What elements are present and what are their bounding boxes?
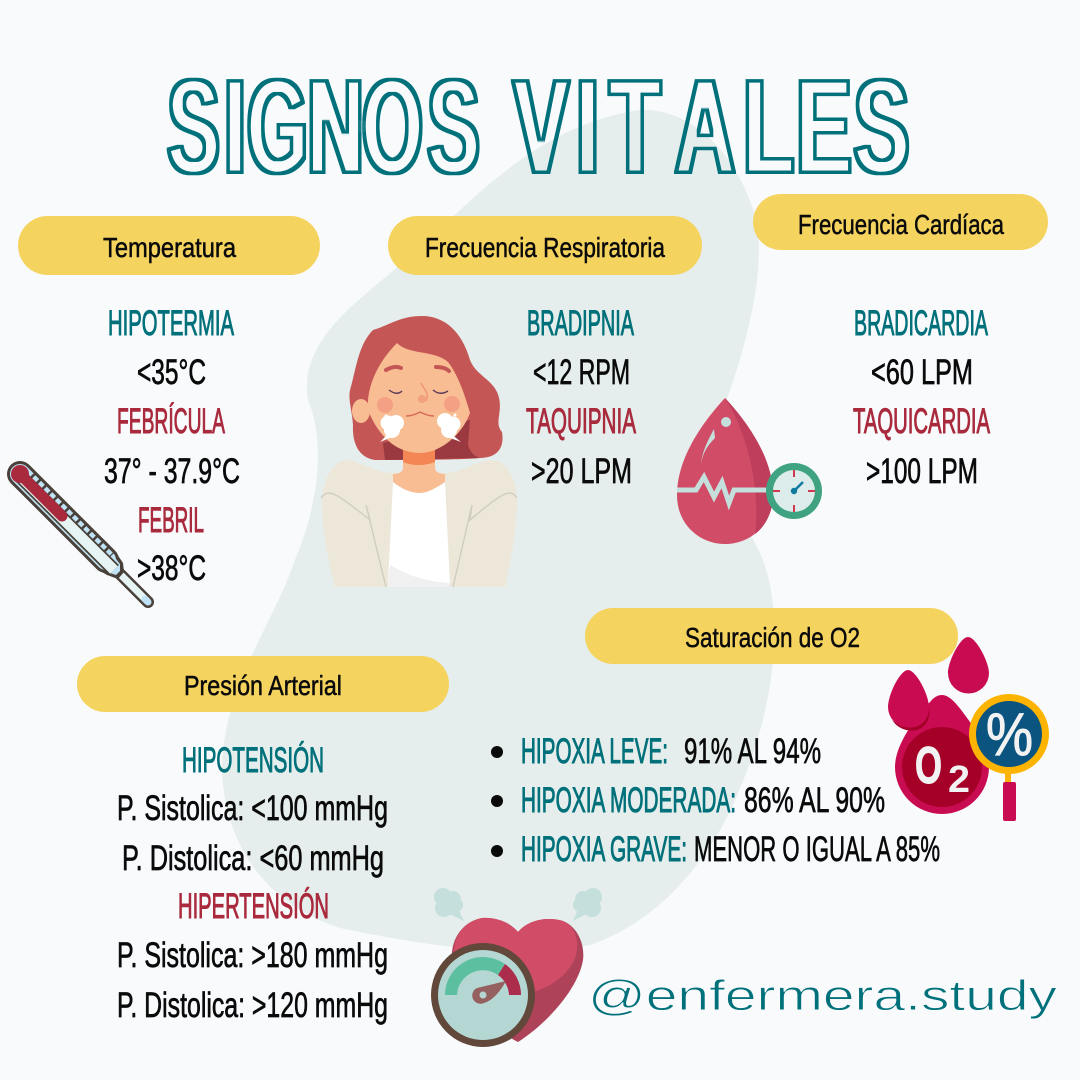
- handle: @enfermera.study: [588, 972, 1058, 1020]
- pill heading: frecuencia respiratoria: [388, 216, 702, 275]
- panel: temperatura: [18, 216, 320, 588]
- bullet: hipoxia leve: 91% AL 94%: [684, 732, 821, 771]
- label: hipotermia: HIPOTERMIA: [108, 304, 234, 343]
- cheeks: [377, 397, 393, 413]
- panel: frecuencia respiratoria: [388, 216, 702, 491]
- pill heading: saturacion: Saturación de O2: [685, 622, 860, 653]
- mouth: [406, 412, 434, 416]
- smoke puffs: [434, 888, 602, 921]
- background blob: [222, 110, 774, 951]
- bullet: hipoxia moderada: 86% AL 90%: [744, 781, 885, 820]
- pill heading: frecuencia cardiaca: Frecuencia Cardíaca: [798, 209, 1004, 240]
- bullet: hipoxia grave: HIPOXIA GRAVE:: [521, 830, 687, 869]
- icon: O2 drops with magnifier: 2: [948, 759, 970, 801]
- eyebrows: [386, 367, 449, 371]
- panel: presion arterial: [77, 656, 449, 1025]
- pill heading: temperatura: [18, 216, 320, 275]
- hair: [349, 316, 503, 460]
- title: [167, 50, 909, 202]
- label: taquipnia: TAQUIPNIA: [526, 402, 636, 441]
- bullet: hipoxia grave: [491, 830, 940, 869]
- title: VITALES: [513, 50, 909, 202]
- value: bradipnia: <12 RPM: [533, 353, 630, 392]
- label: hipertension: HIPERTENSIÓN: [178, 887, 329, 926]
- value: febril: >38°C: [137, 549, 206, 588]
- title: SIGNOS: [167, 52, 480, 202]
- jacket folds: [321, 493, 517, 587]
- panel: saturacion de O2: [491, 608, 958, 869]
- face: [368, 343, 470, 453]
- value: hipotermia: <35°C: [137, 353, 206, 392]
- hair shadow: [383, 420, 480, 460]
- pill heading: frecuencia cardiaca: [753, 194, 1048, 250]
- pill heading: temperatura: Temperatura: [103, 232, 236, 263]
- icon: heart with pressure gauge: [431, 888, 602, 1047]
- value: taquipnia: >20 LPM: [531, 452, 632, 491]
- value: taquicardia: >100 LPM: [866, 452, 978, 491]
- value: distolica baja: P. Distolica: <60 mmHg: [122, 839, 384, 878]
- bullet: hipoxia leve: HIPOXIA LEVE:: [521, 732, 668, 771]
- icon: thermometer: [11, 465, 148, 602]
- nose: [421, 383, 427, 401]
- value: bradicardia: <60 LPM: [871, 353, 973, 392]
- bullet: hipoxia moderada: HIPOXIA MODERADA:: [521, 781, 736, 820]
- icon: blood drop with gauge: [677, 398, 822, 544]
- shirt: [388, 482, 450, 584]
- steam puffs: [380, 413, 461, 442]
- pill heading: frecuencia respiratoria: Frecuencia Respiratoria: [425, 232, 665, 263]
- neck: [393, 448, 445, 493]
- icon: O2 drops with magnifier: [888, 637, 1049, 821]
- label: hipotension: HIPOTENSIÓN: [182, 741, 324, 780]
- panel: frecuencia cardiaca: [753, 194, 1048, 491]
- eyes: [389, 390, 448, 393]
- pill heading: presion arterial: [77, 656, 449, 712]
- label: febricula: FEBRÍCULA: [117, 402, 225, 441]
- bullet: hipoxia grave: MENOR O IGUAL A 85%: [694, 830, 940, 869]
- label: bradipnia: BRADIPNIA: [527, 304, 634, 343]
- value: sistolica alta: P. Sistolica: >180 mmHg: [117, 936, 388, 975]
- illustration: woman with fever: [321, 316, 517, 587]
- collar shadow: [403, 450, 435, 465]
- jacket: [322, 460, 517, 587]
- pill heading: saturacion: [585, 608, 958, 664]
- icon: O2 drops with magnifier: %: [986, 701, 1033, 768]
- value: distolica alta: P. Distolica: >120 mmHg: [117, 986, 388, 1025]
- value: febricula: 37° - 37.9°C: [104, 452, 240, 491]
- label: febril: FEBRIL: [138, 501, 204, 540]
- value: sistolica baja: P. Sistolica: <100 mmHg: [117, 789, 388, 828]
- ear: [352, 399, 370, 423]
- pill heading: presion arterial: Presión Arterial: [184, 670, 342, 701]
- icon: O2 drops with magnifier: O: [915, 737, 942, 795]
